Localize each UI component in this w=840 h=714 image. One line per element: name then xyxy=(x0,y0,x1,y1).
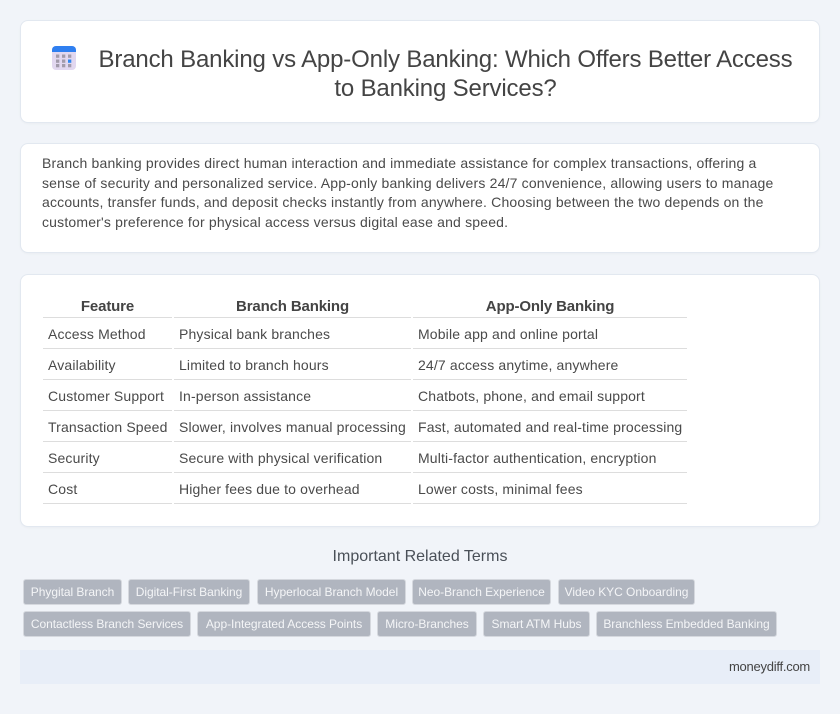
related term tags: Hyperlocal Branch Model xyxy=(265,585,398,599)
comparison table: Fast, automated and real-time processing xyxy=(418,419,682,435)
panel: comparison table xyxy=(20,274,820,527)
related term tags: Contactless Branch Services xyxy=(31,617,183,631)
related term tags: Phygital Branch xyxy=(31,585,114,599)
related term tags: Digital-First Banking xyxy=(136,585,242,599)
comparison table: Multi-factor authentication, encryption xyxy=(418,450,657,466)
comparison table: Lower costs, minimal fees xyxy=(418,481,583,497)
comparison table: Chatbots, phone, and email support xyxy=(418,388,645,404)
comparison table: Secure with physical verification xyxy=(179,450,382,466)
text: introduction paragraph: customer's preference for physical access versus digital ease and speed. xyxy=(42,214,508,230)
text: introduction paragraph: sense of security and personalized service. App-only banking delivers 24/7 convenience, allowing users to manage xyxy=(42,175,773,191)
related term tags: Micro-Branches xyxy=(385,617,469,631)
comparison table: Physical bank branches xyxy=(179,326,330,342)
comparison table: Availability xyxy=(48,357,116,373)
related term tags: Neo-Branch Experience xyxy=(418,585,545,599)
related term tags: Branchless Embedded Banking xyxy=(603,617,770,631)
related term tags: App-Integrated Access Points xyxy=(206,617,362,631)
comparison table: In-person assistance xyxy=(179,388,311,404)
comparison table xyxy=(43,298,687,504)
comparison table: Access Method xyxy=(48,326,146,342)
related term tags: Video KYC Onboarding xyxy=(565,585,688,599)
footer: site name: moneydiff.com xyxy=(729,659,810,674)
title: Branch Banking vs App-Only Banking: Which Offers Better Access xyxy=(99,46,792,73)
comparison table: Branch Banking xyxy=(236,298,349,315)
panel: introduction xyxy=(20,143,820,253)
comparison table: Security xyxy=(48,450,100,466)
comparison table: Cost xyxy=(48,481,77,497)
related term tags: Smart ATM Hubs xyxy=(492,617,581,631)
comparison table: 24/7 access anytime, anywhere xyxy=(418,357,618,373)
title xyxy=(99,46,792,102)
heading: related terms: Important Related Terms xyxy=(333,548,507,565)
comparison table: Customer Support xyxy=(48,388,164,404)
text: introduction paragraph xyxy=(42,155,773,230)
comparison table: App-Only Banking xyxy=(486,298,614,315)
title: to Banking Services? xyxy=(334,75,557,102)
related term tags xyxy=(23,579,777,637)
icon: calendar xyxy=(52,46,76,70)
panel: title header xyxy=(20,20,820,123)
text: introduction paragraph: accounts, transfer funds, and deposit checks instantly from anywhere. Choosing between the two depends on the xyxy=(42,194,764,210)
footer bar xyxy=(20,650,820,684)
text: introduction paragraph: Branch banking provides direct human interaction and immediate assistance for complex transactions, offering a xyxy=(42,155,756,171)
comparison table: Slower, involves manual processing xyxy=(179,419,406,435)
comparison table: Limited to branch hours xyxy=(179,357,329,373)
comparison table: Mobile app and online portal xyxy=(418,326,598,342)
comparison table: Transaction Speed xyxy=(48,419,168,435)
comparison table: Higher fees due to overhead xyxy=(179,481,360,497)
comparison table: Feature xyxy=(81,298,134,315)
